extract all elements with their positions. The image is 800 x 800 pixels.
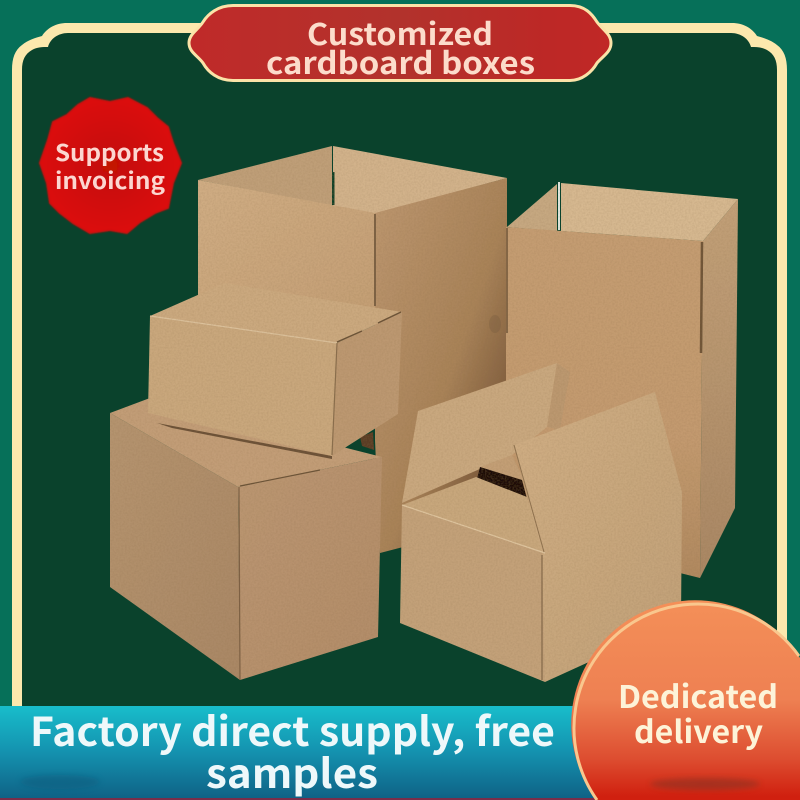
box: small closed box, middle (148, 283, 402, 456)
bottom teal-blue banner (0, 700, 600, 800)
badge text: Supports (55, 134, 164, 168)
banner text: Factory direct supply, free (30, 700, 555, 758)
banner text: samples (206, 742, 378, 800)
circle text: delivery (634, 707, 763, 752)
title text: Customized (307, 10, 493, 54)
title text: cardboard boxes (266, 39, 535, 83)
shadow under middle box (157, 423, 374, 459)
title banner (189, 6, 611, 83)
box: front right box with open flaps (400, 363, 682, 682)
cardboard boxes group (110, 146, 738, 682)
box: tall open box, back right (489, 182, 738, 578)
box: bottom left closed box (110, 398, 382, 680)
orange circle badge: dedicated delivery (571, 600, 800, 800)
badge text: invoicing (55, 162, 165, 196)
circle text: Dedicated (618, 672, 778, 717)
red seal badge: supports invoicing (40, 98, 181, 233)
box: large open box, back left (198, 146, 507, 553)
